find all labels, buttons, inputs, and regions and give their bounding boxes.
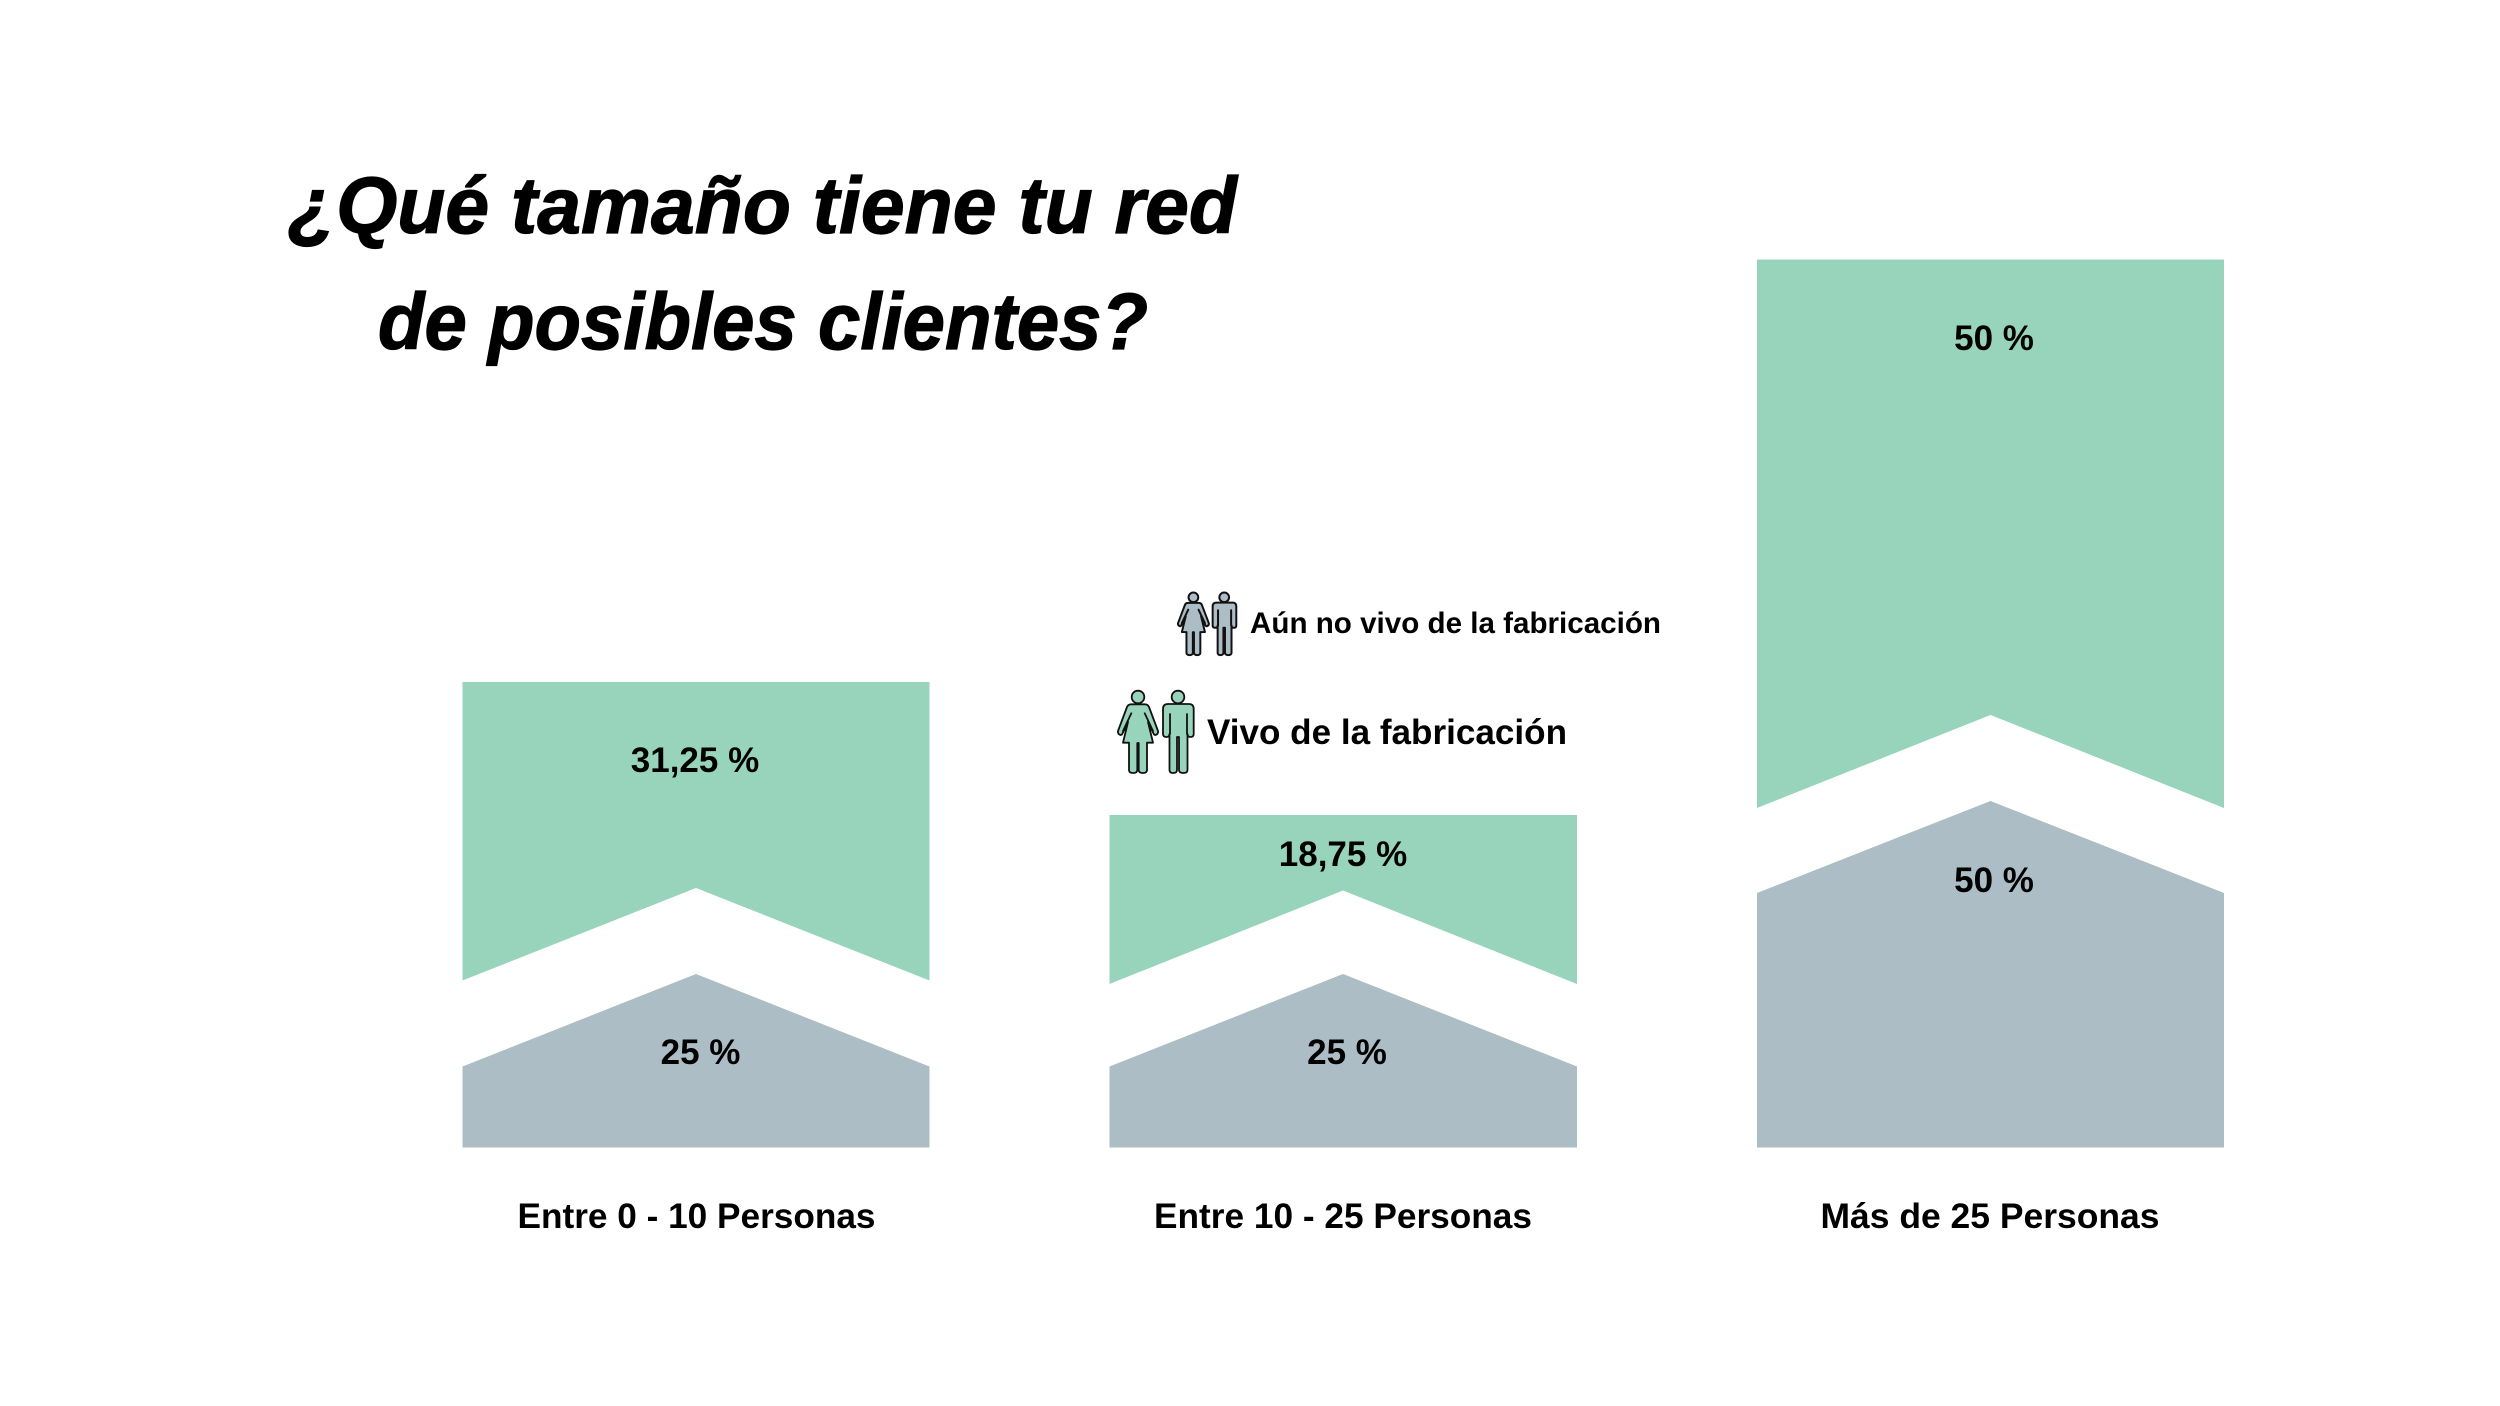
legend text: Aún no vivo de la fabricación (1250, 607, 1661, 640)
title (288, 161, 1239, 366)
green segment 31,25 % (462, 682, 930, 980)
value 25 %: 25 % (1307, 1033, 1387, 1072)
value 50 %: 50 % (1954, 861, 2034, 900)
category label: Más de 25 Personas (1820, 1197, 2160, 1236)
legend: Aún no vivo de la fabricación (1178, 593, 1661, 655)
column: Más de 25 Personas (1757, 260, 2224, 1236)
grey segment 25 % (1110, 974, 1577, 1148)
title: de posibles clientes? (378, 277, 1148, 366)
green segment 18,75 % (1110, 815, 1577, 984)
category label: Entre 10 - 25 Personas (1154, 1197, 1532, 1236)
icon: grey people (1178, 593, 1236, 655)
legend text: Vivo de la fabricación (1207, 713, 1567, 752)
category label: Entre 0 - 10 Personas (518, 1197, 876, 1236)
green segment 50 % (1757, 260, 2224, 808)
legend: Vivo de la fabricación (1118, 691, 1567, 773)
grey segment 50 % (1757, 801, 2224, 1148)
column: Entre 10 - 25 Personas (1110, 815, 1577, 1236)
value 31,25 %: 31,25 % (631, 741, 759, 780)
value 25 %: 25 % (661, 1033, 740, 1072)
grey segment 25 % (462, 974, 930, 1148)
title: ¿Qué tamaño tiene tu red (288, 161, 1239, 250)
icon: green people (1118, 691, 1194, 773)
column: Entre 0 - 10 Personas (462, 682, 930, 1236)
value 50 %: 50 % (1954, 319, 2034, 358)
value 18,75 %: 18,75 % (1279, 835, 1407, 874)
